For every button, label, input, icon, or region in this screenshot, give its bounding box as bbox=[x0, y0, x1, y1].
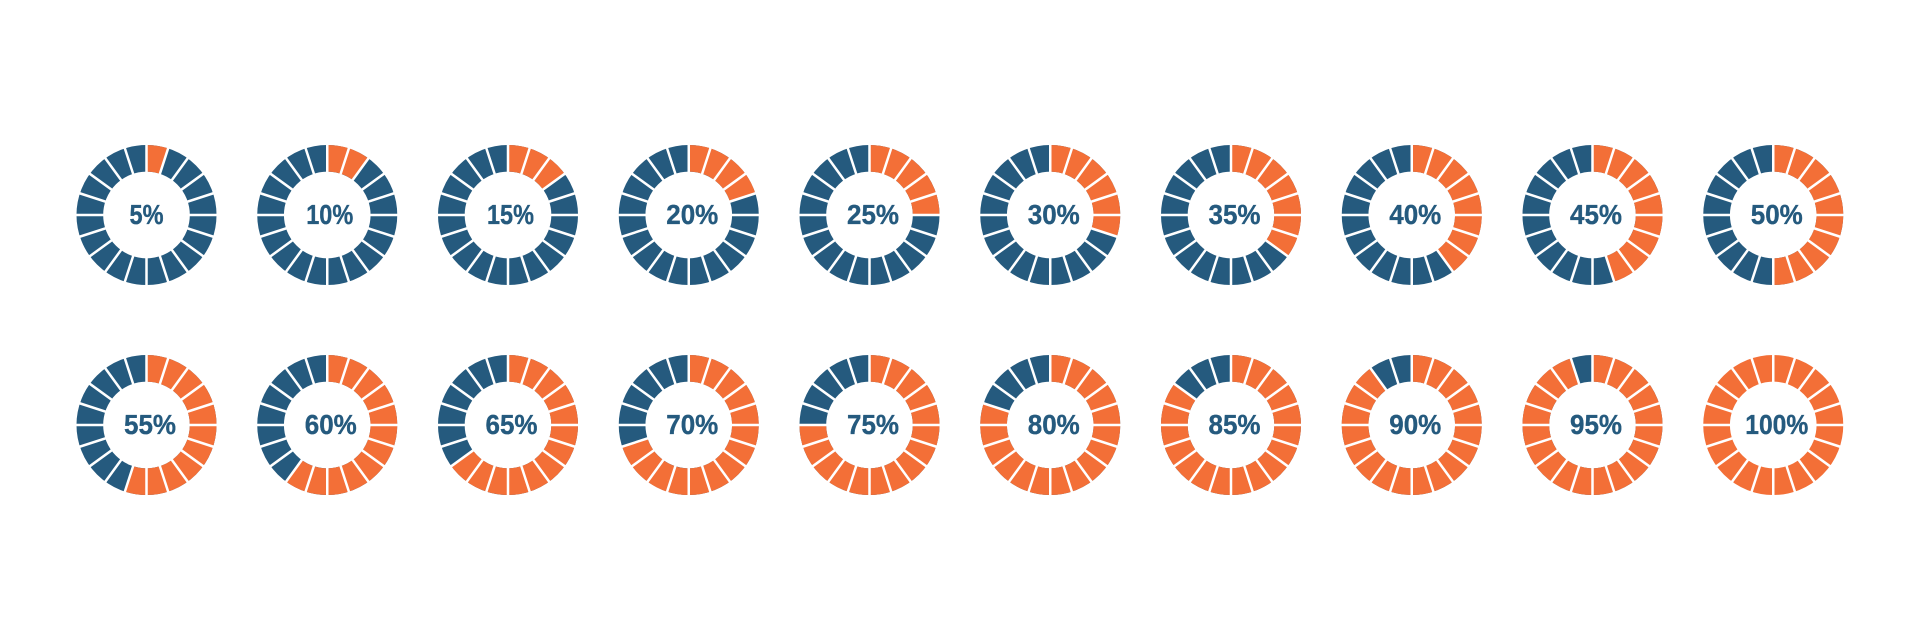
donut: 75% bbox=[769, 324, 970, 526]
donut: 65% bbox=[407, 324, 609, 526]
donut: 90% bbox=[1311, 324, 1512, 526]
donut: 45%: 45% bbox=[1570, 199, 1622, 230]
donut: 100% bbox=[1673, 324, 1874, 526]
donut: 15% bbox=[407, 114, 609, 316]
donut: 35%: 35% bbox=[1208, 199, 1261, 230]
donut: 85% bbox=[1130, 324, 1332, 526]
donut: 100%: 100% bbox=[1745, 409, 1808, 440]
donut: 65%: 65% bbox=[486, 409, 538, 440]
donut: 75%: 75% bbox=[847, 409, 899, 440]
donut: 5% bbox=[46, 114, 247, 316]
donut: 50%: 50% bbox=[1751, 199, 1803, 230]
donut: 80% bbox=[950, 324, 1151, 526]
donut: 5%: 5% bbox=[130, 199, 164, 230]
donut: 55%: 55% bbox=[124, 409, 176, 440]
donut: 70%: 70% bbox=[666, 409, 718, 440]
donut: 55% bbox=[46, 324, 247, 526]
donut: 20% bbox=[588, 114, 789, 316]
donut: 50% bbox=[1673, 114, 1874, 316]
donut: 60%: 60% bbox=[305, 409, 357, 440]
donut: 25%: 25% bbox=[847, 199, 899, 230]
donut: 30%: 30% bbox=[1028, 199, 1080, 230]
donut: 35% bbox=[1130, 114, 1332, 316]
donut: 30% bbox=[950, 114, 1151, 316]
donut: 10%: 10% bbox=[306, 199, 353, 230]
donut: 20%: 20% bbox=[666, 199, 718, 230]
donut: 10% bbox=[227, 114, 428, 316]
donut: 70% bbox=[588, 324, 789, 526]
donut: 95% bbox=[1492, 324, 1693, 526]
donut: 45% bbox=[1492, 114, 1693, 316]
donut: 85%: 85% bbox=[1208, 409, 1261, 440]
donut: 40% bbox=[1311, 114, 1512, 316]
donut: 80%: 80% bbox=[1028, 409, 1080, 440]
donut: 60% bbox=[227, 324, 428, 526]
donut: 90%: 90% bbox=[1389, 409, 1441, 440]
donut: 15%: 15% bbox=[487, 199, 534, 230]
donut: 25% bbox=[769, 114, 970, 316]
donut: 40%: 40% bbox=[1389, 199, 1441, 230]
donut: 95%: 95% bbox=[1570, 409, 1622, 440]
